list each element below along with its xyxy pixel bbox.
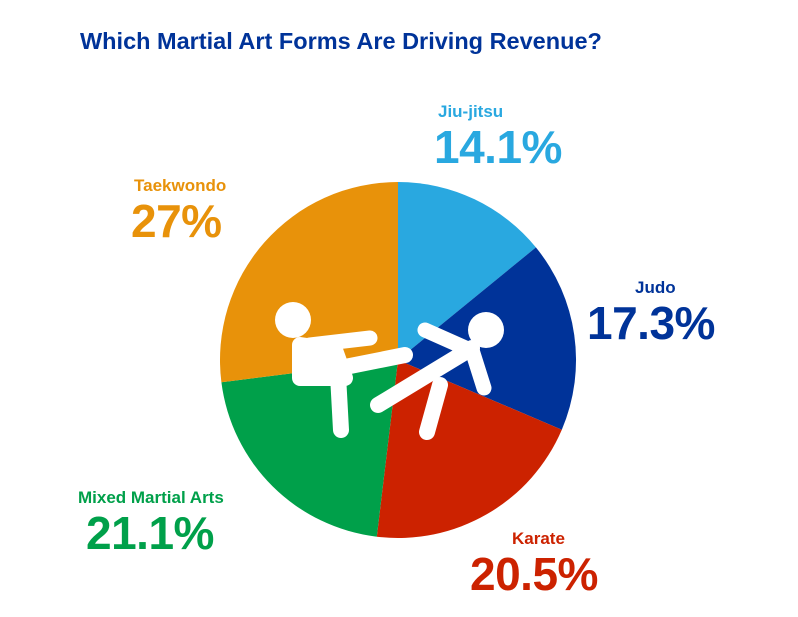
label: Karate: 20.5% — [470, 548, 598, 600]
title: Which Martial Art Forms Are Driving Revenue? — [80, 28, 602, 54]
label: Jiu-jitsu: 14.1% — [434, 121, 562, 173]
label: MMA — [78, 488, 224, 559]
icon: fighters — [275, 302, 504, 432]
label: Karate: Karate — [512, 529, 565, 548]
slice: Judo — [398, 247, 576, 430]
label: MMA: Mixed Martial Arts — [78, 488, 224, 507]
label: Jiu-jitsu: Jiu-jitsu — [438, 102, 503, 121]
label: Taekwondo — [131, 176, 226, 247]
slice: Karate — [377, 360, 562, 538]
slice: MMA — [221, 360, 398, 537]
label: Taekwondo: 27% — [131, 195, 222, 247]
label: Judo: 17.3% — [587, 297, 715, 349]
slice: Taekwondo — [220, 182, 398, 382]
label: Taekwondo: Taekwondo — [134, 176, 226, 195]
label: Judo: Judo — [635, 278, 676, 297]
slice: Jiu-jitsu — [398, 182, 536, 360]
label: MMA: 21.1% — [86, 507, 214, 559]
